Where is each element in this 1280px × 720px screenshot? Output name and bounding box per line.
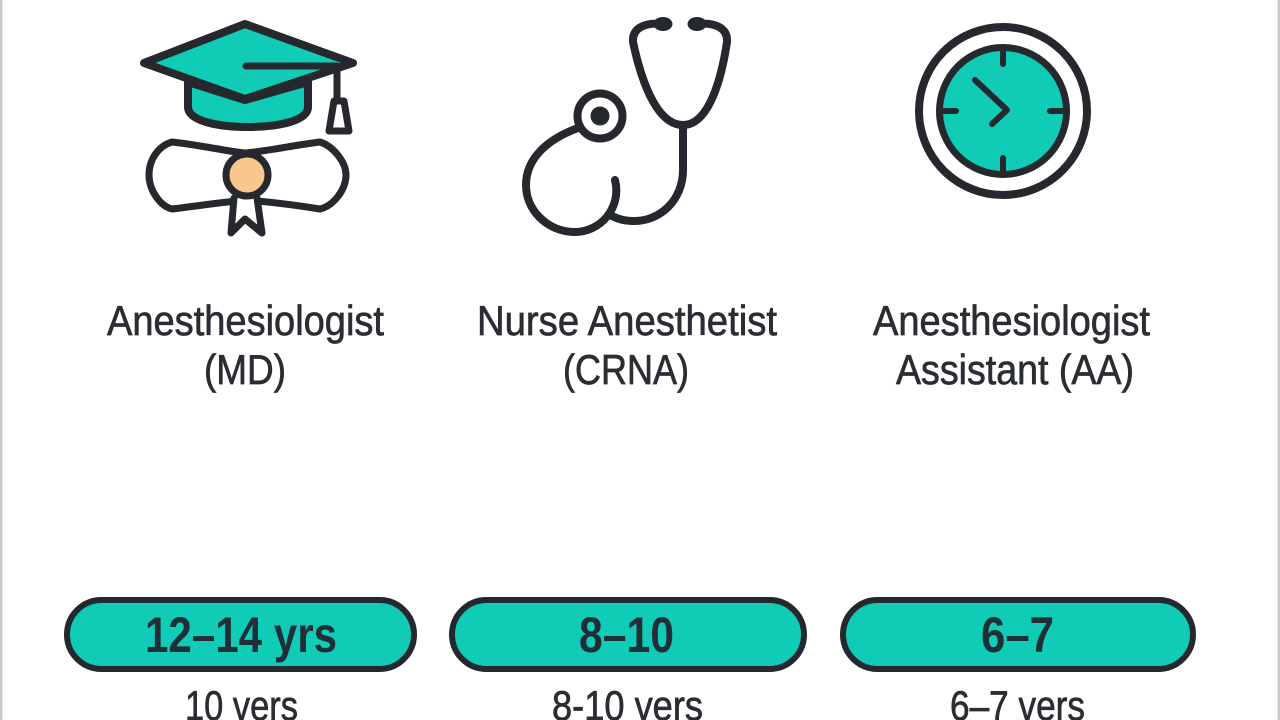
heading: Nurse Anesthetist (CRNA): Nurse Anesthetist (477, 297, 777, 344)
icon: stethoscope (526, 17, 727, 232)
pill: 8–10: 8–10 (579, 607, 674, 663)
heading: Anesthesiologist (MD) (107, 297, 384, 393)
pill: 12–14 yrs (67, 600, 414, 669)
heading: Anesthesiologist Assistant (AA): Anesthesiologist (873, 297, 1150, 344)
heading: Anesthesiologist (MD): (MD) (204, 346, 286, 393)
heading: Anesthesiologist Assistant (AA): Assistant (AA) (896, 346, 1134, 393)
pill: 8–10 (452, 600, 804, 669)
heading: Anesthesiologist Assistant (AA) (873, 297, 1150, 393)
pill: 6–7: 6–7 (981, 607, 1054, 663)
pill: 12–14 yrs: 12–14 yrs (145, 607, 337, 663)
heading: Anesthesiologist (MD): Anesthesiologist (107, 297, 384, 344)
icon: clock (919, 27, 1087, 195)
heading: Nurse Anesthetist (CRNA): (CRNA) (563, 346, 689, 393)
pill: 6–7 (843, 600, 1193, 669)
heading: Nurse Anesthetist (CRNA) (477, 297, 777, 393)
icon: graduation cap and diploma (144, 24, 353, 233)
